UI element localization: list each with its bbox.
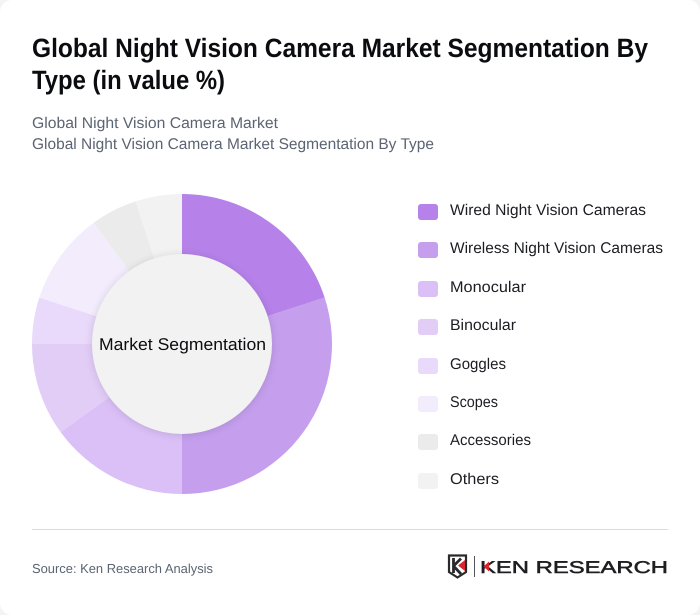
legend item: Binocular — [418, 317, 516, 335]
legend — [418, 202, 663, 489]
title: Type (in value %) — [32, 65, 225, 95]
legend item: Goggles — [418, 356, 506, 374]
subtitle — [32, 115, 434, 153]
source note: Source: Ken Research Analysis — [32, 561, 213, 576]
legend item: Accessories: Accessories — [450, 432, 531, 449]
segment: Monocular — [61, 344, 182, 494]
icon: shield — [449, 556, 466, 578]
donut chart — [32, 194, 332, 494]
legend item: Monocular — [418, 279, 526, 297]
segment: Wireless Night Vision Cameras — [182, 298, 332, 494]
center circle — [92, 254, 272, 434]
legend item: Monocular: Monocular — [450, 279, 526, 296]
legend item: Wired Night Vision Cameras: Wired Night Vision Cameras — [450, 202, 646, 219]
center label: Market Segmentation — [99, 335, 266, 354]
legend item: Scopes — [418, 394, 498, 412]
segment: Accessories — [94, 201, 182, 344]
legend item: Scopes: Scopes — [450, 394, 498, 411]
legend item: Binocular: Binocular — [450, 317, 516, 334]
segment: Scopes — [39, 223, 182, 344]
segment: Binocular — [32, 344, 182, 432]
legend item: Wireless Night Vision Cameras: Wireless Night Vision Cameras — [450, 240, 663, 257]
logo: Ken Research — [449, 556, 668, 578]
legend item: Goggles: Goggles — [450, 356, 506, 373]
title — [32, 33, 648, 95]
legend item: Accessories — [418, 432, 531, 450]
legend item: Others — [418, 471, 499, 489]
legend item: Others: Others — [450, 471, 499, 488]
center shadow — [91, 254, 273, 436]
subtitle: Global Night Vision Camera Market Segmentation By Type — [32, 136, 434, 153]
subtitle: Global Night Vision Camera Market — [32, 115, 279, 132]
segment: Goggles — [32, 298, 182, 344]
segment: Others — [136, 194, 182, 344]
title: Global Night Vision Camera Market Segmentation By — [32, 33, 648, 63]
icon: red K notch — [484, 562, 489, 572]
logo wordmark: KEN RESEARCH — [480, 558, 668, 577]
segment: Wired Night Vision Cameras — [182, 194, 325, 344]
